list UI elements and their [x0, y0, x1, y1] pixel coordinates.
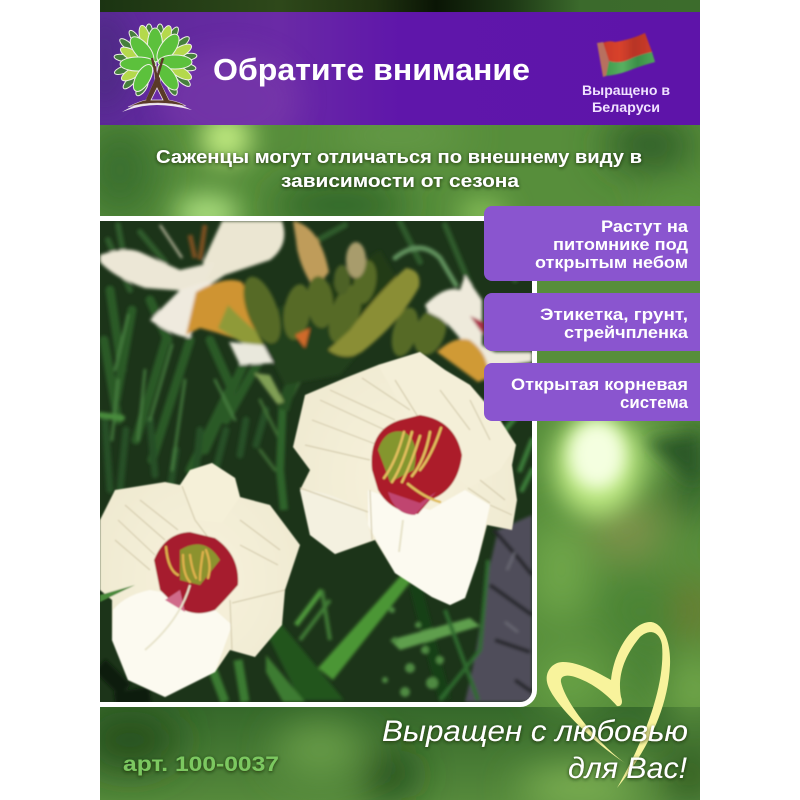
tagline: для Вас! — [568, 752, 688, 785]
subtitle — [156, 146, 642, 191]
top left flower — [203, 221, 284, 288]
panel: grown in open air: Растут на — [601, 217, 689, 236]
subtitle: зависимости от сезона — [281, 170, 520, 191]
article number: арт. 100-0037 — [123, 753, 279, 776]
left flower — [100, 463, 300, 697]
photo frame — [100, 216, 537, 707]
photo: daylily flowers — [100, 221, 532, 702]
panel: packaging: Этикетка, грунт, — [540, 305, 688, 324]
stems — [280, 395, 284, 510]
green blurred background — [80, 0, 715, 800]
badge text — [582, 83, 670, 115]
header band — [100, 12, 700, 125]
badge text: Беларуси — [592, 100, 660, 115]
panel: open root system — [484, 363, 700, 421]
title: Обратите внимание — [213, 52, 530, 87]
badge text: Выращено в — [582, 83, 670, 98]
tagline — [382, 715, 688, 785]
icon: tree logo — [113, 24, 197, 112]
right flower — [293, 352, 517, 605]
buds — [293, 221, 329, 290]
foliage — [100, 221, 532, 702]
panel: grown in open air: питомнике под — [553, 235, 688, 254]
panel: packaging — [484, 293, 700, 351]
subtitle: Саженцы могут отличаться по внешнему виду в — [156, 146, 642, 167]
icon: heart — [547, 622, 670, 788]
panel: open root system: система — [620, 393, 689, 412]
panel: grown in open air — [484, 206, 700, 281]
icon: Belarus flag — [597, 33, 655, 77]
lower leaves — [266, 620, 344, 700]
stones — [465, 515, 532, 702]
panel: open root system: Открытая корневая — [511, 375, 688, 394]
panel: grown in open air: открытым небом — [535, 253, 688, 272]
panel: packaging: стрейчпленка — [564, 323, 689, 342]
tagline: Выращен с любовью — [382, 715, 688, 748]
right upper flower — [425, 275, 532, 368]
